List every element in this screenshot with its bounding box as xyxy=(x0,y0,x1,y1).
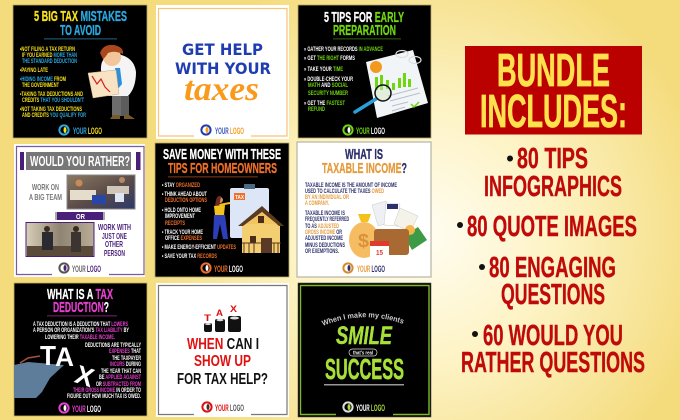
illustration: TAX letters on cliff: X xyxy=(71,359,99,393)
text block: homeowner tips: • THINK AHEAD ABOUT xyxy=(162,192,207,198)
panel: smile success quote xyxy=(298,282,432,418)
option: one other person: PERSON xyxy=(104,248,125,258)
logo: YOUR LOGO xyxy=(214,264,243,274)
icon: TAX coin stacks xyxy=(204,304,241,332)
text block: definition: BY AN INDIVIDUAL OR xyxy=(305,195,349,201)
text block: mistakes list: THE GOVERNMENT xyxy=(22,83,59,89)
logo: YOUR LOGO xyxy=(356,126,385,136)
text block: deduction definition: A TAX DEDUCTION IS A DEDUCTION THAT LOWERS xyxy=(33,322,128,328)
text block: homeowner tips: IMPROVEMENT xyxy=(165,214,195,220)
text block: deduction definition: FIGURE OUT HOW MUCH TAX IS OWED. xyxy=(67,394,141,400)
heading: 5 big tax mistakes: TO AVOID xyxy=(60,22,101,39)
text block: mistakes list: •HIDING INCOME FROM xyxy=(20,77,66,83)
text block: deduction definition: DEDUCTIONS ARE TYPICALLY xyxy=(85,343,141,349)
logo: YOUR LOGO xyxy=(72,264,101,274)
item: 60 would you rather questions xyxy=(461,320,645,379)
logo: YOUR LOGO xyxy=(73,126,102,136)
text block: mistakes list: IF YOU EARNED MORE THAN xyxy=(22,53,77,59)
text block: homeowner tips: • MAKE ENERGY-EFFICIENT UPDATES xyxy=(162,245,236,251)
option: one other person: JUST ONE xyxy=(102,231,127,241)
text block: definition: TO AS ADJUSTED xyxy=(305,224,339,230)
text block: deduction definition: THE TAXPAYER xyxy=(112,356,141,362)
text block: tips list: » GET THE FASTEST xyxy=(304,101,345,107)
text block: deduction definition: INCURS DURING xyxy=(110,362,141,368)
heading: taxable income xyxy=(322,146,407,177)
text block: definition: TAXABLE INCOME IS xyxy=(305,211,345,217)
text block: tips list: » GATHER YOUR RECORDS IN ADVANCE xyxy=(304,47,383,53)
icon: money bag, wallet, calendar, papers xyxy=(349,201,427,258)
logo: YOUR LOGO xyxy=(72,404,101,414)
text block: mistakes list: •NOT FILING A TAX RETURN xyxy=(20,47,75,53)
text block: deduction definition: BE APPLIED AGAINST xyxy=(99,375,141,381)
heading bar: would you rather: WOULD YOU RATHER? xyxy=(30,153,130,170)
panel: when can I show up xyxy=(156,283,289,417)
text block: mistakes list: •NOT TAKING TAX DEDUCTIONS xyxy=(20,107,82,113)
heading: 5 big tax mistakes: 5 BIG TAX MISTAKES xyxy=(34,8,127,25)
quote text: that's real xyxy=(353,350,374,356)
logo: YOUR LOGO xyxy=(357,264,385,274)
quote text xyxy=(321,312,404,386)
text block: deduction definition xyxy=(33,322,141,400)
banner: bundle includes xyxy=(465,44,642,137)
heading: save money: SAVE MONEY WITH THESE xyxy=(163,146,281,163)
text block: mistakes list: •PAYING LATE xyxy=(20,68,48,74)
heading: 5 tips xyxy=(324,9,404,39)
text block: mistakes list: •TAKING TAX DEDUCTIONS AND xyxy=(20,92,83,98)
text block: homeowner tips: • HOLD ONTO HOME xyxy=(162,208,201,214)
panel: would you rather xyxy=(14,144,145,277)
text block: mistakes list xyxy=(20,47,86,119)
text block: definition xyxy=(305,183,397,255)
illustration: TAX letters on cliff xyxy=(14,340,99,398)
quote text: SMILE xyxy=(336,322,393,350)
list: bundle contents xyxy=(457,143,645,379)
text block: deduction definition: OR SUBTRACTED FROM xyxy=(96,382,141,388)
heading: taxable income: WHAT IS xyxy=(345,146,383,163)
text block: homeowner tips: DEDUCTION OPTIONS xyxy=(165,198,207,204)
panel: 5 big tax mistakes xyxy=(13,5,147,138)
quote text: SUCCESS xyxy=(325,354,404,386)
item: 80 engaging questions xyxy=(479,252,616,311)
icon: TAX coin stacks: X xyxy=(230,304,237,314)
illustration: TAX letters on cliff: A xyxy=(55,342,74,372)
text block: definition: MINUS DEDUCTIONS xyxy=(305,243,345,249)
icon: TAX coin stacks: T xyxy=(204,313,212,323)
text block: tips list: MATH AND SOCIAL xyxy=(308,83,348,89)
heading: 5 tips: 5 TIPS FOR EARLY xyxy=(324,9,404,26)
heading: when can I show up: FOR TAX HELP? xyxy=(177,371,268,388)
heading: when can I show up: WHEN CAN I xyxy=(187,336,259,353)
text block: deduction definition: THEIR GROSS INCOME IN ORDER TO xyxy=(73,388,141,394)
icon: TAX coin stacks: A xyxy=(216,308,224,318)
quote text: When I make my clients xyxy=(321,312,404,326)
option: one other person: WORK WITH xyxy=(98,222,131,232)
text block: mistakes list: CREDITS THAT YOU SHOULDN'T xyxy=(22,98,84,104)
text block: homeowner tips: • SAVE YOUR TAX RECORDS xyxy=(162,254,217,260)
text block: definition: FREQUENTLY REFERRED xyxy=(305,217,349,223)
panel: get help with your taxes xyxy=(156,5,289,139)
text block: tips list: REFUND xyxy=(308,107,325,113)
text block: homeowner tips: • STAY ORGANIZED xyxy=(162,183,200,189)
text block: deduction definition: A PERSON OR ORGANIZATION'S TAX LIABILITY BY xyxy=(33,328,129,334)
item: 80 engaging questions: QUESTIONS xyxy=(501,279,605,311)
text block: tips list xyxy=(304,47,383,113)
icon: document with chart, magnifier, glasses xyxy=(355,50,428,118)
panel: 5 tips for early preparation xyxy=(298,5,431,138)
text block: tips list: » GET THE RIGHT FORMS xyxy=(304,56,355,62)
heading: save money: TIPS FOR HOMEOWNERS xyxy=(168,160,277,177)
heading: tax deduction: WHAT IS A TAX xyxy=(47,286,113,303)
text block: homeowner tips: OFFICE EXPENSES xyxy=(165,236,202,242)
heading: get help with your: GET HELP xyxy=(182,40,263,59)
text block: homeowner tips: • TRACK YOUR HOME xyxy=(162,230,203,236)
text block: tips list: » TAKE YOUR TIME xyxy=(304,67,343,73)
text block: deduction definition: LOWERING THEIR TAXABLE INCOME. xyxy=(45,335,115,341)
text block: tips list: SECURITY NUMBER xyxy=(308,91,348,97)
heading: tax deduction xyxy=(47,286,117,316)
text: taxes script: taxes xyxy=(184,71,259,108)
heading: get help with your: WITH YOUR xyxy=(175,59,271,78)
heading: 5 big tax mistakes xyxy=(34,8,127,39)
panel: what is a tax deduction xyxy=(14,283,147,416)
text block: tips list: » DOUBLE-CHECK YOUR xyxy=(304,77,353,83)
icon: clipboard, person and house: TAX xyxy=(235,195,245,201)
item: 80 tips infographics: 80 TIPS xyxy=(517,143,588,175)
text block: homeowner tips xyxy=(162,183,236,260)
option: big team: A BIG TEAM xyxy=(29,192,62,202)
heading: tax deduction: DEDUCTION? xyxy=(53,299,109,316)
option: one other person xyxy=(26,222,131,258)
or divider: OR xyxy=(76,212,85,221)
icon: money bag, wallet, calendar, papers: $ xyxy=(358,231,369,251)
logo: YOUR LOGO xyxy=(356,403,385,413)
text block: definition: GROSS INCOME OR xyxy=(305,230,342,236)
heading: 5 tips: PREPARATION xyxy=(333,22,396,39)
text block: definition: A COMPANY. xyxy=(305,201,329,207)
item: 80 tips infographics xyxy=(484,143,622,203)
heading: when can I show up: SHOW UP xyxy=(194,353,251,370)
text block: homeowner tips: RECEIPTS xyxy=(165,221,185,227)
text block: deduction definition: THE YEAR THAT CAN xyxy=(101,369,141,375)
heading: save money xyxy=(163,146,281,177)
text block: definition: USED TO CALCULATE THE TAXES OWED xyxy=(305,189,384,195)
text block: definition: OR EXEMPTIONS. xyxy=(305,249,339,255)
heading: get help with your xyxy=(175,40,271,78)
option: big team: WORK ON xyxy=(32,182,59,192)
icon: money bag, wallet, calendar, papers: 15 xyxy=(376,250,383,257)
option: big team xyxy=(29,175,135,209)
heading: when can I show up xyxy=(177,336,268,388)
text block: definition: TAXABLE INCOME IS THE AMOUNT OF INCOME xyxy=(305,183,397,189)
logo: YOUR LOGO xyxy=(215,403,244,413)
text block: mistakes list: THE STANDARD DEDUCTION xyxy=(22,59,77,65)
panel: what is taxable income xyxy=(297,142,431,277)
text block: definition: ADJUSTED INCOME xyxy=(305,236,343,242)
heading: taxable income: TAXABLE INCOME? xyxy=(322,160,407,177)
option: one other person: OTHER xyxy=(105,239,123,249)
illustration: TAX letters on cliff: T xyxy=(40,340,56,371)
logo: YOUR LOGO xyxy=(215,126,244,136)
text block: mistakes list: AND CREDITS YOU QUALIFY FOR xyxy=(22,113,86,119)
panel: save money homeowners xyxy=(155,143,289,277)
text block: deduction definition: EXPENSES THAT xyxy=(109,349,141,355)
icon: worried man holding chart xyxy=(88,45,136,119)
